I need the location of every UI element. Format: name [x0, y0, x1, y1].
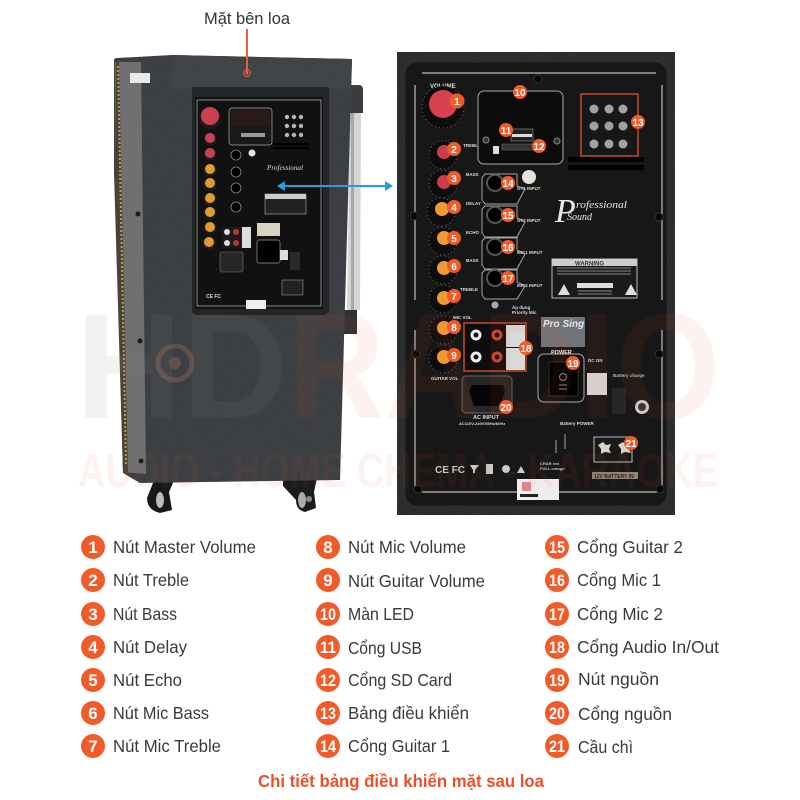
- warning label: WARNING: [575, 262, 604, 268]
- legend column 1: 2: [88, 571, 98, 590]
- mini control panel: CE FC: [206, 294, 221, 300]
- mini control panel: Professional: [266, 164, 303, 172]
- input jacks: Áp dụng: [512, 304, 530, 310]
- legend column 1: Nút Delay: [113, 637, 187, 657]
- audio jacks: [464, 323, 526, 371]
- legend column 3: Cổng Mic 2: [577, 604, 663, 624]
- logo: Professional Sound: Sound: [567, 212, 593, 223]
- power switch: POWER: [551, 350, 572, 356]
- legend column 2: Cổng USB: [348, 638, 422, 658]
- badge numbers on panel: 6: [451, 262, 457, 273]
- power switch: [538, 350, 649, 414]
- input jacks: GT1 INPUT: [517, 186, 541, 191]
- watermark: [76, 282, 720, 498]
- legend column 1: Nút Echo: [113, 670, 182, 690]
- legend column 1: Nút Bass: [113, 604, 177, 624]
- side label: Mặt bên loa: Mặt bên loa: [204, 9, 291, 28]
- legend column 1: 1: [88, 538, 98, 557]
- right handle: [343, 85, 363, 334]
- battery fuse block: Battery POWER: [560, 421, 595, 426]
- LED / USB module: [478, 91, 563, 164]
- Pro Sing sticker: Pro Sing: [543, 319, 584, 330]
- knob labels: VOLUME: [430, 84, 456, 90]
- legend column 2: 13: [320, 704, 336, 723]
- battery fuse block: 12V BATTERY IN: [594, 474, 634, 480]
- number badges on panel: [447, 85, 645, 450]
- badge numbers on panel: 19: [567, 359, 579, 370]
- input jacks: GT2 INPUT: [517, 218, 541, 223]
- logo: Professional Sound: rofessional: [576, 199, 627, 211]
- Pro Sing sticker: [541, 317, 585, 347]
- badge numbers on panel: 8: [451, 323, 457, 334]
- badge numbers on panel: 16: [502, 243, 514, 254]
- control buttons: [568, 94, 644, 170]
- input jacks: Priority Mic: [512, 310, 537, 315]
- mini control panel: [195, 97, 323, 309]
- bottom sticker: [517, 479, 559, 500]
- legend column 3: Cầu chì: [578, 737, 633, 757]
- legend column 3: 15: [549, 538, 565, 557]
- legend column 3: 17: [549, 605, 565, 624]
- legend column 3: 21: [549, 737, 565, 756]
- badge numbers on panel: [451, 88, 644, 450]
- legend column 1: Nút Mic Bass: [113, 703, 209, 723]
- badge numbers on panel: 20: [500, 403, 512, 414]
- battery fuse block: CHAR red: [540, 461, 559, 466]
- caption: Chi tiết bảng điều khiển mặt sau loa: [258, 771, 544, 791]
- knob labels: TREBLE: [463, 143, 481, 148]
- badge numbers on panel: 17: [502, 274, 514, 285]
- badge numbers on panel: 18: [520, 344, 532, 355]
- legend column 3: Cổng Audio In/Out: [577, 637, 719, 657]
- legend column 3: Cổng Mic 1: [577, 570, 661, 590]
- speaker body: [114, 55, 352, 483]
- logo: Professional Sound: P: [554, 193, 576, 230]
- legend column 2: 8: [323, 538, 333, 557]
- knob labels: BASS: [466, 172, 479, 177]
- badge numbers on panel: 5: [451, 234, 457, 245]
- legend column 1: 4: [88, 638, 98, 657]
- AC input socket: AC INPUT: [473, 415, 500, 421]
- legend column 2: Nút Mic Volume: [348, 537, 466, 557]
- legend column 3: 20: [549, 704, 565, 723]
- watermark: HD: [76, 282, 288, 450]
- badge numbers on panel: 13: [632, 118, 644, 129]
- legend column 2: 11: [320, 638, 336, 657]
- legend column 2: 12: [320, 671, 336, 690]
- badge numbers on panel: 21: [625, 439, 637, 450]
- screws: [410, 75, 664, 493]
- legend column 2: [316, 535, 485, 758]
- legend column 2: 9: [323, 571, 333, 590]
- legend column 2: Màn LED: [348, 604, 414, 624]
- certification marks: [435, 464, 525, 476]
- legend column 3: [545, 535, 719, 758]
- legend column 1: [81, 535, 256, 758]
- panel recess: [192, 87, 329, 315]
- AC input socket: [459, 376, 512, 426]
- power switch: Battery charge: [613, 373, 645, 378]
- illustration: speaker side view: [114, 29, 363, 513]
- knob labels: DELAY: [466, 201, 481, 206]
- knob labels: TREBLE: [460, 287, 478, 292]
- watermark: RADIO: [288, 282, 720, 450]
- legend column 1: 3: [88, 605, 98, 624]
- legend column 3: 16: [549, 571, 565, 590]
- input jacks: [482, 170, 543, 315]
- plate lines: [415, 73, 662, 492]
- side grille strip: [115, 62, 150, 474]
- knobs: [422, 86, 464, 373]
- knob labels: MIC VOL: [453, 315, 472, 320]
- panel: rear control panel: [397, 52, 675, 515]
- badge numbers on panel: 9: [451, 351, 457, 362]
- legend column 2: Nút Guitar Volume: [348, 571, 485, 591]
- badge numbers on panel: 15: [502, 211, 514, 222]
- legend column 2: Cổng Guitar 1: [348, 736, 450, 756]
- blue double arrow: [277, 181, 393, 191]
- legend column 2: 14: [320, 737, 336, 756]
- legend column 2: Cổng SD Card: [348, 670, 452, 690]
- legend column 3: 19: [549, 671, 565, 690]
- legend column 2: Bảng điều khiển: [348, 703, 469, 723]
- badge numbers on panel: 3: [451, 174, 457, 185]
- battery fuse block: [540, 421, 638, 480]
- legend column 3: Cổng Guitar 2: [577, 537, 683, 557]
- knob labels: [430, 84, 481, 381]
- legend column 3: Cổng nguồn: [578, 704, 672, 724]
- warning label: [552, 259, 637, 298]
- badge numbers on panel: 7: [451, 292, 457, 303]
- legend column 1: 7: [88, 737, 98, 756]
- legend column 3: 18: [549, 638, 565, 657]
- badge numbers on panel: 10: [514, 88, 526, 99]
- certification marks: CE FC: [435, 465, 465, 476]
- badge numbers on panel: 14: [502, 179, 514, 190]
- legend column 3: Nút nguồn: [578, 669, 659, 689]
- logo: Professional Sound: [554, 193, 627, 230]
- AC input socket: AC110V-240V/50Hz/60Hz: [459, 421, 505, 426]
- badge numbers on panel: 4: [451, 203, 457, 214]
- legend column 1: Nút Treble: [113, 570, 189, 590]
- badge numbers on panel: 12: [533, 142, 545, 153]
- input jacks: MIC2 INPUT: [517, 283, 543, 288]
- legend column 1: 5: [88, 671, 98, 690]
- input jacks: MIC1 INPUT: [517, 250, 543, 255]
- red pointer line: [244, 29, 250, 76]
- legend column 1: Nút Master Volume: [113, 537, 256, 557]
- knob labels: BASS: [466, 258, 479, 263]
- wheels: [147, 478, 317, 513]
- legend column 1: 6: [88, 704, 98, 723]
- power switch: DC ON: [588, 358, 602, 363]
- legend column 2: 10: [320, 605, 336, 624]
- legend column 1: Nút Mic Treble: [113, 736, 221, 756]
- badge numbers on panel: 1: [454, 97, 460, 108]
- knob labels: ECHO: [466, 230, 480, 235]
- battery fuse block: FULL orange: [540, 466, 565, 471]
- badge numbers on panel: 11: [501, 126, 512, 137]
- badge numbers on panel: 2: [451, 145, 457, 156]
- knob labels: GUITAR VOL: [431, 376, 459, 381]
